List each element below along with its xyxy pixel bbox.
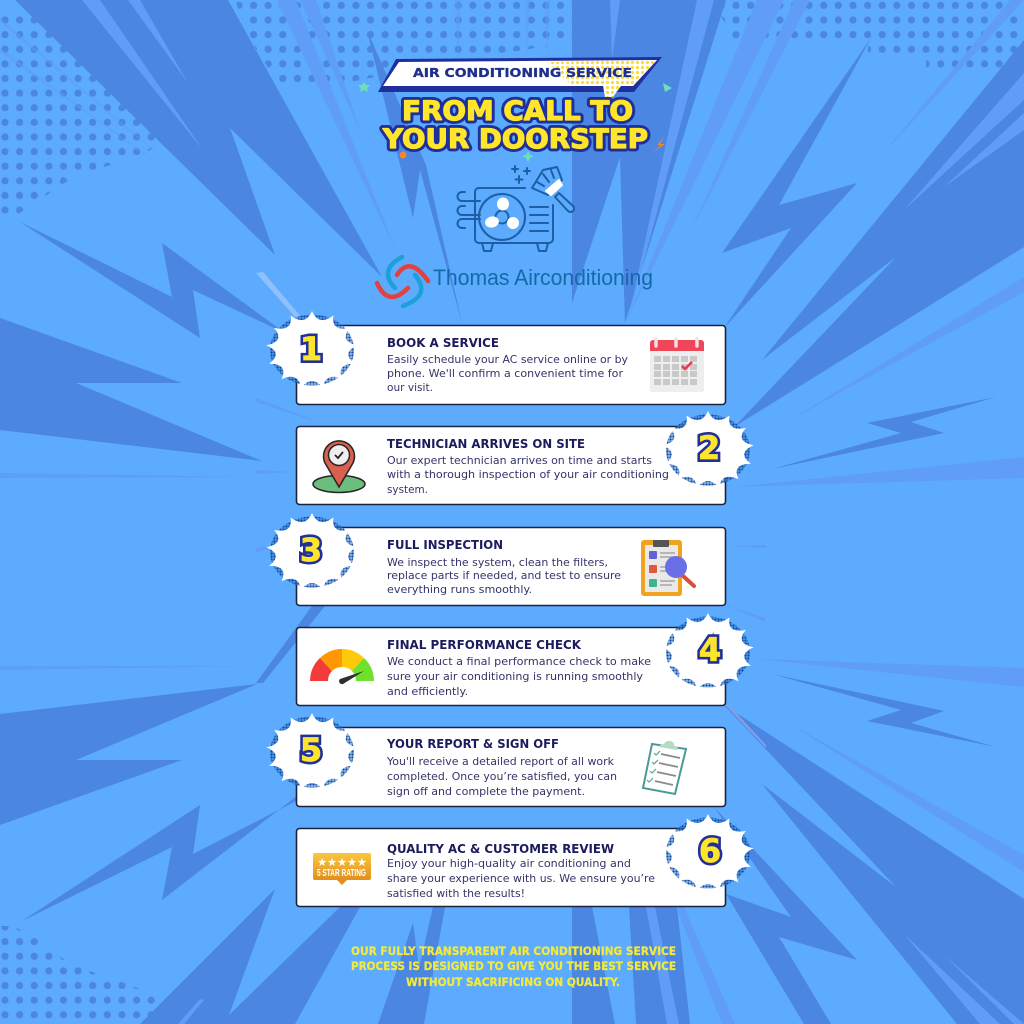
step 4 description: We conduct a final performance check to make <box>387 656 651 668</box>
step 4 description <box>387 656 651 698</box>
step 5 heading: YOUR REPORT & SIGN OFF <box>386 737 559 751</box>
logo swirl <box>377 257 428 306</box>
step 4 heading: FINAL PERFORMANCE CHECK <box>387 638 582 652</box>
footer statement: PROCESS IS DESIGNED TO GIVE YOU THE BEST SERVICE <box>351 959 676 973</box>
panel: step 4 final performance check <box>296 628 726 706</box>
badge 6: 6 <box>699 832 721 870</box>
footer statement <box>351 944 676 989</box>
badge 5: 5 <box>300 731 322 769</box>
logo: thomas airconditioning: Thomas Airconditioning <box>433 265 653 290</box>
heading: from call to your doorstep: FROM CALL TO <box>402 96 633 127</box>
step 2 heading: TECHNICIAN ARRIVES ON SITE <box>387 437 585 451</box>
badge 5 <box>266 713 358 790</box>
step 1 description: phone. We'll confirm a convenient time for <box>387 368 624 380</box>
banner: air conditioning service: AIR CONDITIONING SERVICE <box>413 65 632 80</box>
badge 3: 3 <box>300 531 322 569</box>
panel: step 3 full inspection <box>296 528 726 606</box>
step 6 description: share your experience with us. We ensure you’re <box>387 873 655 885</box>
badge 2: 2 <box>698 429 720 467</box>
decorative sparks <box>358 82 672 162</box>
banner: air conditioning service <box>378 57 662 97</box>
badge 3: 3 <box>300 531 322 569</box>
panel: step 1 book a service <box>296 326 726 404</box>
badge 1: 1 <box>300 330 322 368</box>
icon: clipboard with magnifier <box>641 540 694 596</box>
panel: step 5 report and sign off <box>296 728 726 806</box>
icon: five star rating <box>313 853 371 885</box>
logo: thomas airconditioning <box>377 257 653 306</box>
step 5 description: You'll receive a detailed report of all work <box>386 756 615 768</box>
badge 1 <box>266 311 358 388</box>
step 6 description: satisfied with the results! <box>387 888 525 900</box>
badge 5: 5 <box>300 731 322 769</box>
footer statement: WITHOUT SACRIFICING ON QUALITY. <box>406 975 620 989</box>
panel: step 2 technician arrives <box>296 426 726 504</box>
badge 6: 6 <box>699 832 721 870</box>
step 2 description: with a thorough inspection of your air conditioning <box>387 469 669 481</box>
badge 6 <box>662 814 754 891</box>
step 4 description: sure your air conditioning is running smoothly <box>387 671 643 683</box>
icon: air conditioner with brush <box>458 166 574 251</box>
heading: from call to your doorstep: YOUR DOORSTEP <box>382 124 648 155</box>
step 1 description <box>387 354 628 394</box>
step 3 description: replace parts if needed, and test to ensure <box>387 570 621 582</box>
badge 1: 1 <box>300 330 322 368</box>
step 5 description <box>386 756 617 798</box>
footer statement: OUR FULLY TRANSPARENT AIR CONDITIONING SERVICE <box>351 944 676 958</box>
badge 2 <box>662 411 754 488</box>
step 5 description: sign off and complete the payment. <box>387 786 585 798</box>
step 3 description <box>387 557 621 596</box>
heading: from call to your doorstep: YOUR DOORSTEP <box>382 124 648 155</box>
icon: calendar <box>650 339 704 392</box>
badge 3 <box>266 513 358 590</box>
badge 4 <box>662 613 754 690</box>
step 3 heading: FULL INSPECTION <box>387 538 503 552</box>
heading: from call to your doorstep <box>382 96 648 155</box>
panel: step 6 quality and review <box>296 828 726 906</box>
badge 4: 4 <box>699 631 721 669</box>
icon: five star rating: ★★★★★ <box>317 855 367 869</box>
step 5 description: completed. Once you’re satisfied, you can <box>387 771 617 783</box>
step 6 description: Enjoy your high-quality air conditioning and <box>387 858 631 870</box>
step 3 description: We inspect the system, clean the filters, <box>387 557 608 569</box>
step 2 description <box>387 455 669 496</box>
step 3 description: everything runs smoothly. <box>387 584 532 596</box>
title block <box>358 57 672 162</box>
icon: performance gauge <box>310 649 374 684</box>
step 1 description: our visit. <box>387 382 433 394</box>
icon: five star rating: 5 STAR RATING <box>317 867 366 879</box>
step 2 description: system. <box>387 484 428 496</box>
icon: report checklist <box>643 741 686 794</box>
heading: from call to your doorstep: FROM CALL TO <box>402 96 633 127</box>
badge 2: 2 <box>698 429 720 467</box>
step 4 description: and efficiently. <box>387 686 468 698</box>
step 6 heading: QUALITY AC & CUSTOMER REVIEW <box>387 842 615 856</box>
step 1 heading: BOOK A SERVICE <box>387 336 499 350</box>
icon: location pin <box>313 441 365 492</box>
step 6 description <box>387 858 655 900</box>
step 2 description: Our expert technician arrives on time and starts <box>387 455 652 467</box>
step 1 description: Easily schedule your AC service online or by <box>387 354 628 366</box>
badge 4: 4 <box>699 631 721 669</box>
